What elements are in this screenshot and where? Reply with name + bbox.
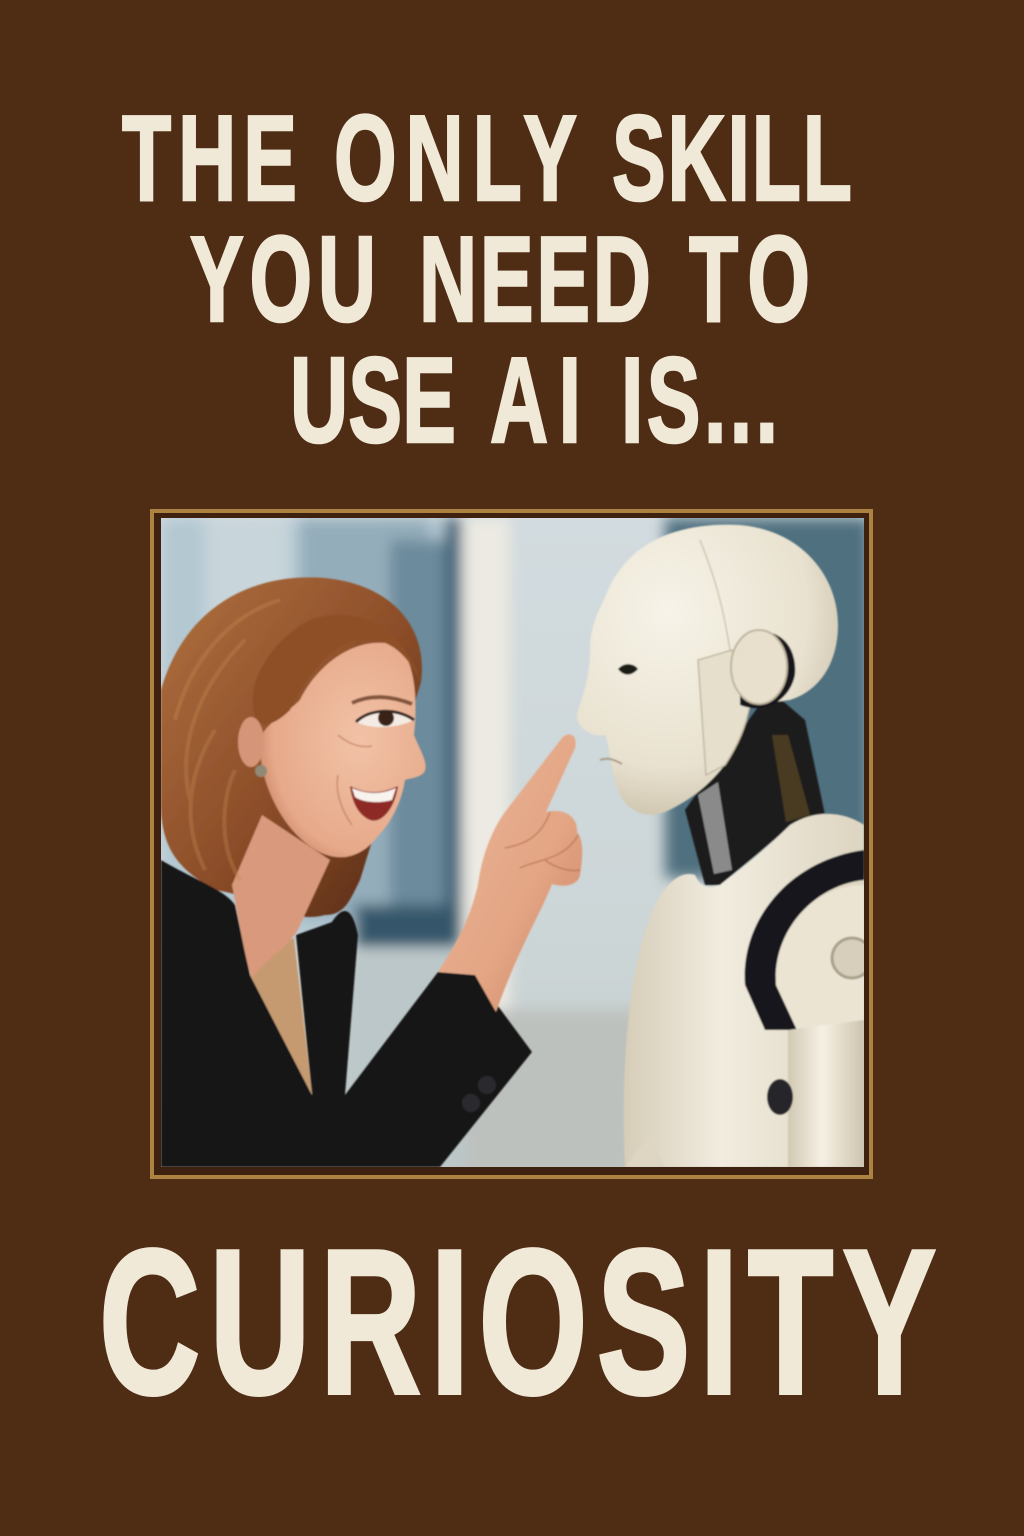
woman hair front (253, 615, 421, 724)
woman face (260, 643, 426, 857)
title: NEED (419, 210, 651, 347)
photo: woman pointing at robot's nose (161, 518, 872, 1170)
title: IS... (621, 331, 778, 468)
robot body (624, 814, 872, 1167)
woman ear and earring (238, 717, 267, 777)
woman hair back (161, 577, 422, 917)
office background (161, 518, 870, 1170)
robot head (577, 525, 838, 815)
people (161, 525, 872, 1167)
woman arm and pointing hand (438, 734, 582, 1012)
title: ONLY (334, 89, 577, 226)
title (122, 89, 852, 468)
robot mouth (600, 759, 622, 764)
woman jacket (161, 860, 532, 1167)
woman smile (337, 775, 398, 825)
title: SKILL (612, 89, 852, 226)
woman neck (232, 815, 330, 978)
title: THE (122, 89, 297, 226)
title: USE (290, 331, 456, 468)
robot eye (618, 664, 638, 675)
woman hair strands (175, 600, 280, 880)
title: TO (689, 210, 810, 347)
robot ear (731, 630, 795, 708)
title: AI (490, 331, 581, 468)
woman eye and brow (338, 697, 414, 747)
robot neck (685, 690, 825, 885)
photo frame (152, 511, 871, 1177)
title: YOU (190, 210, 376, 347)
keyword: curiosity: CURIOSITY (99, 1208, 936, 1437)
